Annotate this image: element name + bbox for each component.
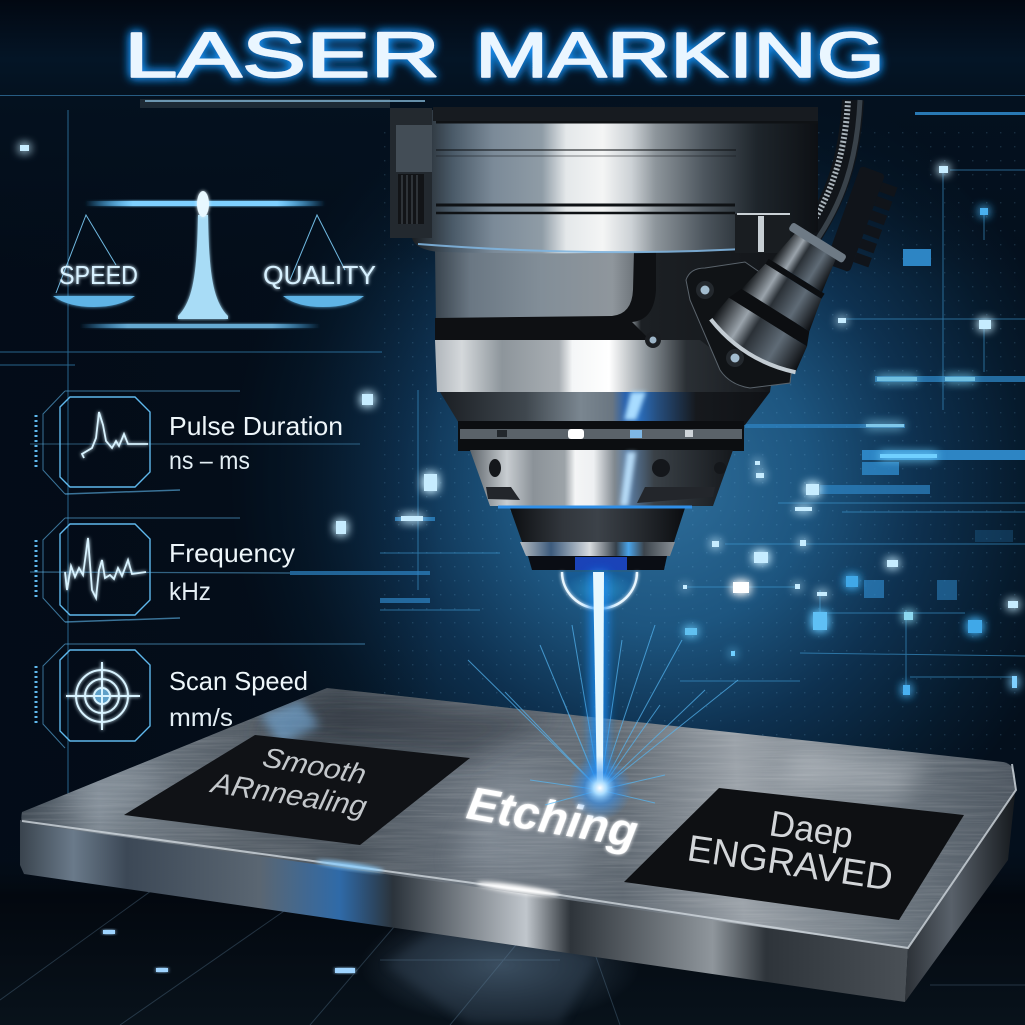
beam aperture [562,572,637,608]
pulse icon [82,412,148,458]
speed label: SPEED [59,260,138,290]
mount screws [696,281,744,367]
nozzle collar [520,542,675,556]
title: LASER [124,19,440,91]
knurled knob [825,166,900,278]
lower cone screws and grips [486,452,726,506]
plate edge highlight [22,764,1016,948]
upper housing [412,110,818,253]
speed vs quality scale [53,191,376,328]
laser beam [468,572,738,820]
tech background lines and glowing squares [0,110,1025,860]
clamp bracket [735,214,790,253]
plate top surface [21,688,1016,948]
black band [435,250,656,340]
floor [0,840,1025,1025]
panel: deep engraved [624,788,964,920]
housing rim highlight [418,244,760,252]
unit: kHz [169,578,211,606]
waveform icon [65,538,146,598]
screw [645,332,661,348]
mount plate [686,262,800,388]
unit: mm/s [169,704,233,732]
title [124,19,885,91]
top shading [0,98,1025,278]
tip blue lens [575,557,627,570]
parameter: scan speed [36,644,365,748]
left bracket [390,108,432,238]
cone section [440,392,770,425]
metal workpiece plate [0,680,1025,1002]
edge flare blue [316,858,384,874]
label: smooth annealing [206,742,370,823]
icon frame [30,391,360,494]
sparks [468,625,738,805]
right pan strings [290,215,345,280]
left pan [53,296,135,307]
beam glow [590,572,608,790]
plate right side [905,785,1016,1002]
plate front side [20,820,908,1002]
scale knob [197,191,209,217]
parameter: pulse duration [30,391,360,494]
title rail [0,95,1025,108]
label: Scan Speed [169,666,308,696]
label: Frequency [169,538,295,568]
label: smooth annealing: Smooth [260,742,369,790]
icon frame [36,644,365,748]
nozzle blue rim [498,506,692,508]
silver band [435,340,767,392]
label: smooth annealing: ARnnealing [206,767,370,823]
brushed texture [22,690,1014,944]
left pan strings [56,215,116,293]
lens ring [458,421,744,451]
left dark fade [0,98,440,898]
scale beam [85,201,325,206]
title: MARKING [475,19,885,91]
label: etching: Etching [463,777,642,858]
right pan [283,296,364,307]
unit: ns – ms [169,447,250,475]
impact point [568,756,632,820]
label: deep engraved: ENGRAVED [685,827,896,899]
icon frame [30,518,290,622]
aperture ring [562,572,637,608]
blue accent on cone [624,392,646,420]
flexible hose [803,100,860,244]
parameter: frequency [30,518,295,622]
lower cone [470,450,733,506]
nozzle tip [528,556,667,570]
top dark band [0,0,1025,98]
quality label: QUALITY [263,260,376,290]
laser head [390,100,900,570]
lower housing [435,250,790,392]
dark rings on housing [436,122,818,213]
edge flare white [476,879,560,899]
beam core [593,572,604,790]
hose coupling [706,212,862,380]
panel: smooth annealing [124,735,470,845]
label: Pulse Duration [169,411,343,441]
housing top collar [433,107,818,121]
scale post [178,215,228,319]
target icon [66,662,140,730]
ring details [460,429,742,439]
nozzle [510,508,685,542]
label: deep engraved: Daep [767,802,856,856]
scale base line [80,324,320,328]
